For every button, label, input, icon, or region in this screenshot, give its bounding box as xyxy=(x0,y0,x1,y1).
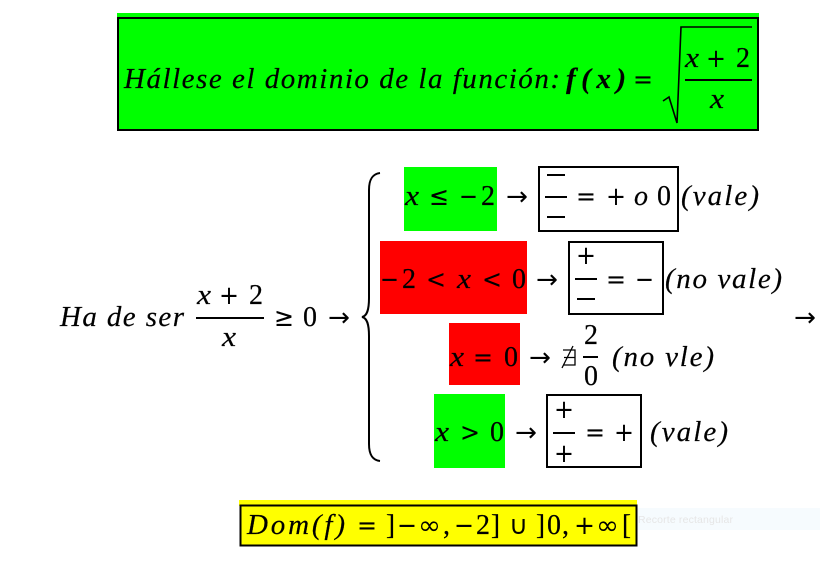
fraction under radical: x xyxy=(709,83,724,115)
faint tooltip: Recorte rectangular xyxy=(638,514,734,526)
fraction under radical: 2 xyxy=(736,43,750,74)
fraction: x+2 over x: + xyxy=(219,281,239,311)
row 1: x ≤ -2: 2 xyxy=(481,181,495,212)
row 2: -2 < x < 0: < xyxy=(426,265,446,295)
row 2: -2 < x < 0: − xyxy=(380,265,399,295)
formula: f(x): f(x) xyxy=(566,63,626,95)
fraction: x+2 over x: x xyxy=(196,279,211,311)
row 3: x = 0: x xyxy=(449,341,464,373)
heading: title text: Hállese el dominio de la función: xyxy=(123,63,560,95)
arrow: → xyxy=(536,265,558,295)
fraction: 2 over 0: 0 xyxy=(584,361,598,392)
result formula: ∞ xyxy=(596,511,619,541)
boxed sign result: − xyxy=(635,265,654,295)
result formula: 2 xyxy=(476,510,490,541)
fraction: x+2 over x xyxy=(196,279,264,353)
fraction: 2 over 0: 2 xyxy=(584,320,598,351)
result formula: 0 xyxy=(547,510,561,541)
result formula: − xyxy=(397,511,417,541)
boxed sign result: + xyxy=(554,439,574,469)
row 4: x > 0 xyxy=(434,394,728,469)
fraction: 2 over 0 xyxy=(583,320,598,392)
row 2: -2 < x < 0: x xyxy=(456,263,471,295)
fraction under radical: + xyxy=(706,44,726,74)
arrow: to result: → xyxy=(794,303,816,333)
result formula: Dom(f) xyxy=(246,509,345,541)
text: premise: Ha de ser xyxy=(59,301,185,333)
boxed sign result: + xyxy=(554,395,574,425)
text: premise: 0 xyxy=(303,302,317,333)
result formula: , xyxy=(443,510,450,541)
result formula: ] xyxy=(491,510,500,541)
row 2: -2 < x < 0: 2 xyxy=(402,264,416,295)
boxed sign result xyxy=(539,167,678,231)
row 2: -2 < x < 0: 0 xyxy=(512,264,526,295)
row 2: -2 < x < 0: < xyxy=(482,265,502,295)
result formula: = xyxy=(357,511,377,541)
fraction under radical: x xyxy=(684,42,699,74)
arrow: → xyxy=(529,343,551,373)
row 3: x = 0: = xyxy=(473,343,493,373)
row 3: x = 0 xyxy=(449,320,714,392)
result formula: ∞ xyxy=(418,511,441,541)
fraction under radical xyxy=(684,42,752,115)
result formula: [ xyxy=(622,510,631,541)
result formula: ∪ xyxy=(509,511,528,541)
row 4: x > 0: > xyxy=(460,418,480,448)
result formula: + xyxy=(574,511,595,541)
row 4: x > 0: x xyxy=(434,416,449,448)
boxed sign result xyxy=(569,241,663,314)
boxed sign result: 0 xyxy=(657,181,671,212)
arrow: → xyxy=(506,182,528,212)
panel: result xyxy=(239,500,637,546)
panel: title xyxy=(117,13,759,130)
verdict: (no vle) xyxy=(612,341,714,373)
result formula: − xyxy=(454,511,474,541)
fraction: x+2 over x: x xyxy=(221,321,236,353)
arrow: → xyxy=(328,303,350,333)
result formula xyxy=(246,509,631,541)
row 4: x > 0: 0 xyxy=(490,417,504,448)
faint tooltip xyxy=(637,508,820,530)
boxed sign result: = xyxy=(585,418,605,448)
boxed sign result: = xyxy=(576,182,596,212)
fraction: x+2 over x: 2 xyxy=(249,280,263,311)
result formula: ] xyxy=(536,510,545,541)
boxed sign result: + xyxy=(606,182,626,212)
equals sign: = xyxy=(633,65,653,95)
greater or equal zero: ≥ xyxy=(274,303,294,333)
result formula: ] xyxy=(386,510,395,541)
row 1: x ≤ -2: ≤ xyxy=(429,182,449,212)
row 1: x ≤ -2: − xyxy=(459,182,478,212)
boxed sign result xyxy=(547,395,641,469)
verdict: (vale) xyxy=(650,416,728,448)
row 3: x = 0: 0 xyxy=(504,342,518,373)
boxed sign result: o xyxy=(634,180,648,212)
arrow: → xyxy=(515,418,537,448)
result formula: , xyxy=(562,510,569,541)
verdict: (vale) xyxy=(681,180,759,212)
boxed sign result: + xyxy=(614,418,634,448)
brace xyxy=(362,173,380,461)
row 1: x ≤ -2 xyxy=(404,167,759,231)
radical sign xyxy=(663,27,752,123)
boxed sign result: = xyxy=(606,265,626,295)
does not exist symbol xyxy=(562,346,575,368)
row 1: x ≤ -2: x xyxy=(404,180,419,212)
text: premise xyxy=(59,279,350,353)
verdict: (no vale) xyxy=(665,263,782,295)
boxed sign result: + xyxy=(576,241,596,271)
row 2: -2 < x < 0 xyxy=(380,241,782,314)
